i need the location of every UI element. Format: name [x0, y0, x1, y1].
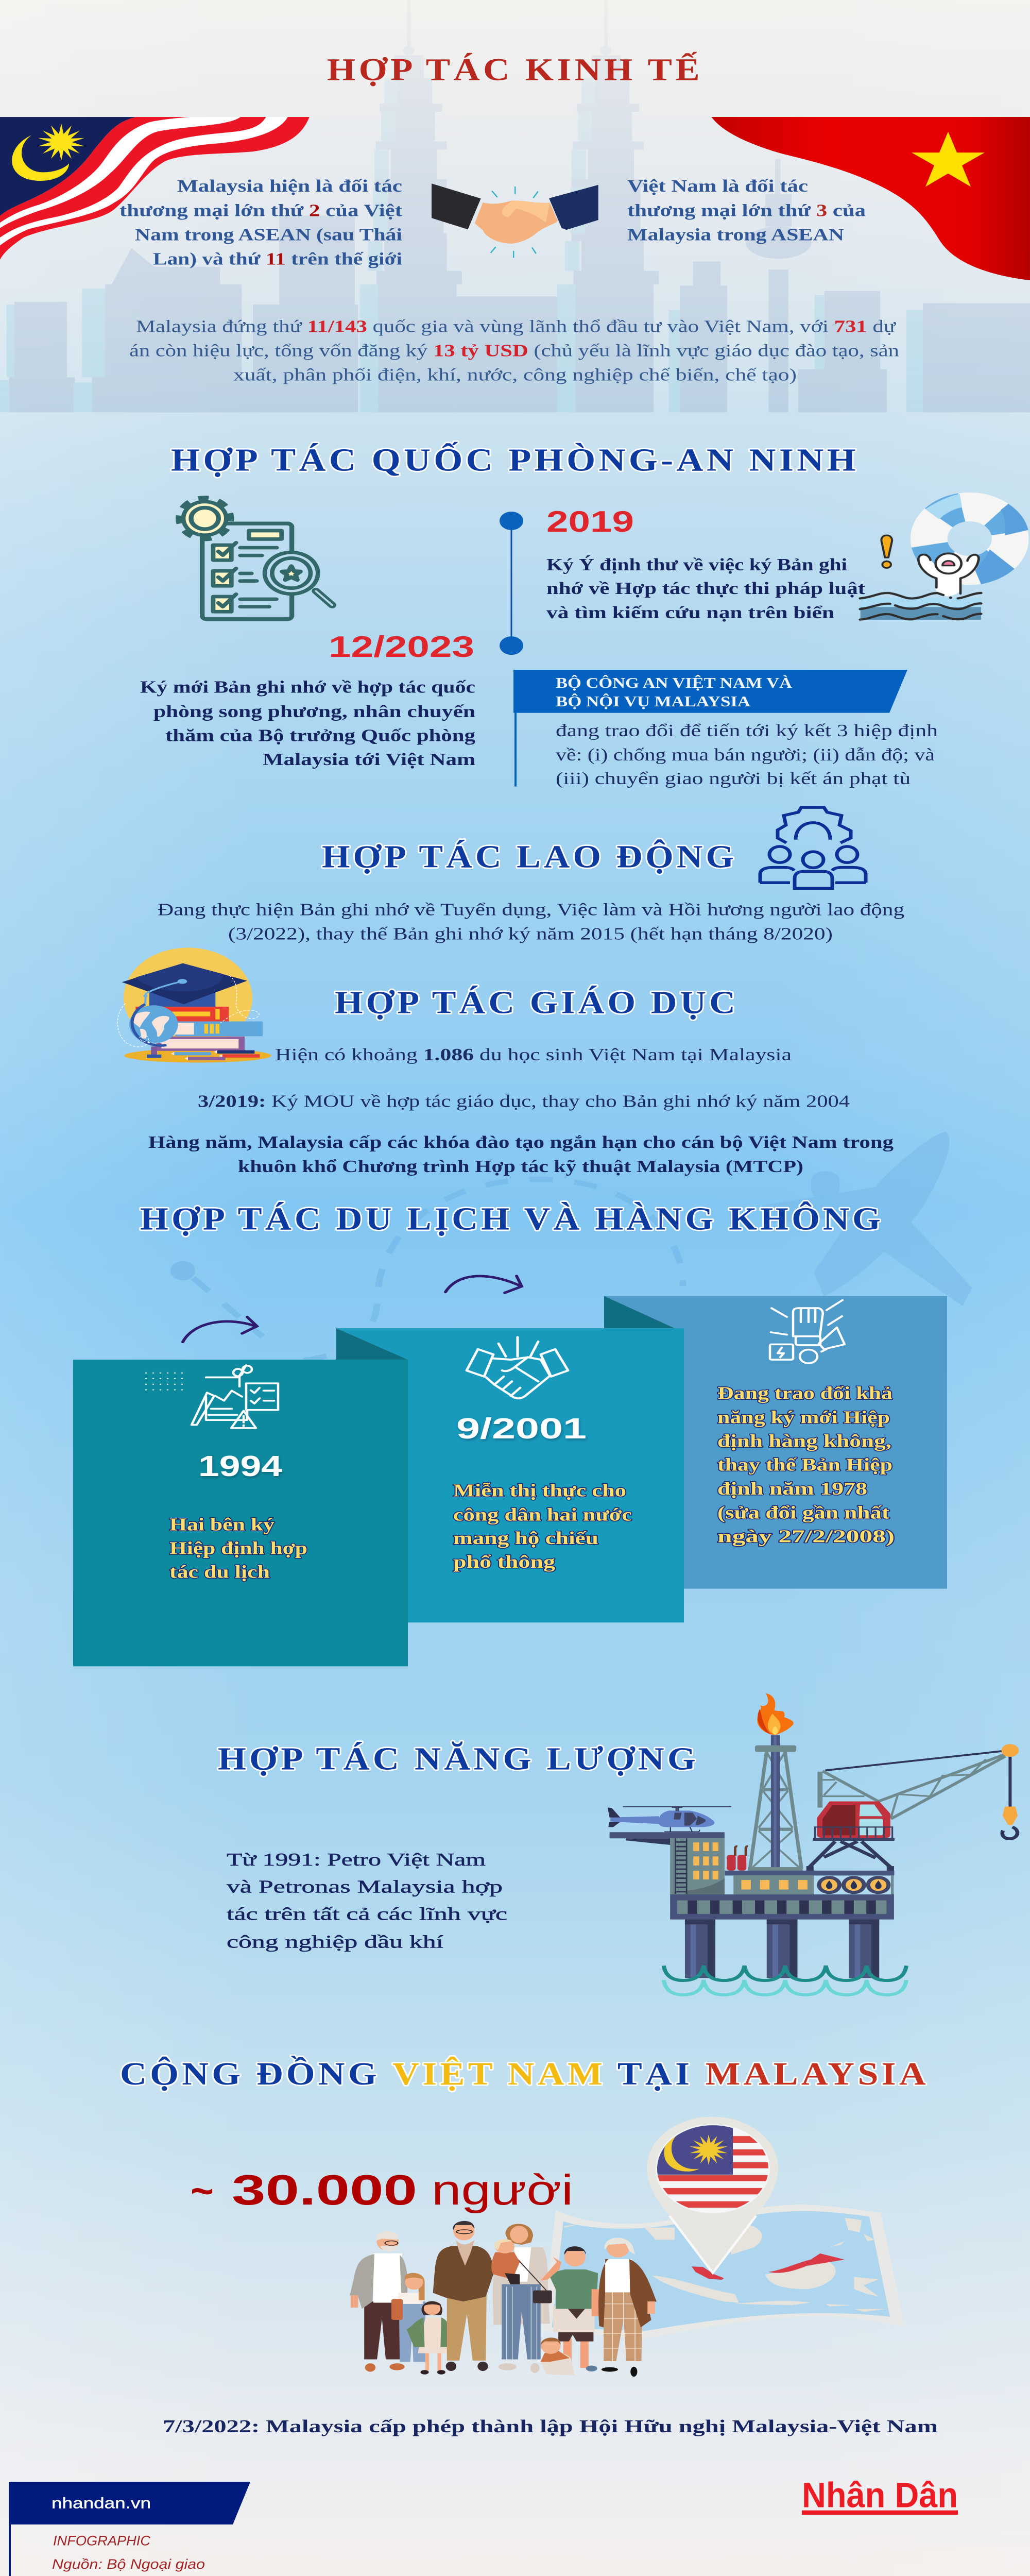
figure: about 30,000 people [191, 2166, 573, 2214]
flag: Vietnam [711, 117, 1030, 280]
icon: graduation cap, books and globe [117, 947, 271, 1062]
text: agreements under discussion: về: (i) chống mua bán người; (ii) dẫn độ; và [556, 745, 935, 765]
text: education facts [148, 1045, 894, 1176]
heading: tourism and aviation: HỢP TÁC DU LỊCH VÀ HÀNG KHÔNG [140, 1201, 884, 1237]
flag: Malaysia [0, 117, 310, 260]
derrick [748, 1735, 803, 1871]
crane boom [820, 1754, 1005, 1819]
text: energy cooperation: công nghiệp dầu khí [227, 1931, 443, 1952]
text: tourism agreement: Hai bên ký [169, 1515, 274, 1534]
text: 12/2023 description: thăm của Bộ trưởng Quốc phòng [165, 726, 475, 745]
text: investment paragraph: xuất, phân phối điện, khí, nước, công nghiệp chế biến, chế tạo) [233, 366, 797, 384]
text: tourism agreement: Hiệp định hợp [169, 1538, 307, 1558]
text: labor MoU: Đang thực hiện Bản ghi nhớ về Tuyển dụng, Việc làm và Hồi hương người lao động [158, 901, 904, 919]
icon: lifebuoy and drowning person [860, 494, 1028, 620]
banner: ministries [513, 670, 907, 787]
arrow: step one to two [183, 1317, 257, 1342]
platform decks [610, 1832, 894, 1920]
text: agreements under discussion: (iii) chuyển giao người bị kết án phạt tù [556, 769, 911, 788]
father [433, 2221, 493, 2371]
text: investment paragraph: án còn hiệu lực, tổng vốn đăng ký 13 tỷ USD (chủ yếu là lĩnh vực giáo dục đào tạo, sản [129, 342, 899, 360]
icon: handshake outline [467, 1337, 568, 1398]
grandmother [598, 2238, 657, 2377]
icon: fist and megaphone [770, 1300, 845, 1363]
footer: source: INFOGRAPHIC [53, 2533, 151, 2549]
text: Malaysia partner: Nam trong ASEAN (sau Thái [135, 226, 402, 244]
icon: people and gear [760, 807, 866, 888]
illustration: offshore oil rig [608, 1693, 1019, 1995]
toddler [541, 2337, 575, 2376]
text: energy cooperation: Từ 1991: Petro Việt Nam [227, 1850, 486, 1870]
text: air agreement: định năm 1978 [717, 1479, 867, 1499]
text: 2019 description: nhớ về Hợp tác thực thi pháp luật [546, 579, 865, 598]
text: 2019 description [546, 555, 865, 622]
text: friendship association: 7/3/2022: Malaysia cấp phép thành lập Hội Hữu nghị Malaysia-Việt Nam [163, 2416, 938, 2436]
icon: handshake [432, 183, 598, 258]
text: visa exemption: mang hộ chiếu [453, 1528, 598, 1548]
mother holding baby [491, 2224, 552, 2373]
text: visa exemption [453, 1481, 632, 1572]
year 12/2023: 12/2023 [329, 631, 474, 664]
text: air agreement: thay thế Bản Hiệp [717, 1455, 892, 1475]
text: Vietnam partner: thương mại lớn thứ 3 của [627, 201, 866, 220]
crane cab [813, 1801, 895, 1841]
young girl in green [406, 2301, 453, 2375]
text: Malaysia partner [119, 177, 402, 268]
illustration: map [542, 2205, 905, 2338]
boy [541, 2246, 600, 2371]
card: 9/2001 visa exemption [336, 1328, 684, 1622]
text: tourism agreement [169, 1515, 307, 1582]
arrow: step two to three [445, 1276, 522, 1293]
text: agreements under discussion [556, 721, 938, 788]
text: 12/2023 description: phòng song phương, nhân chuyến [153, 702, 475, 721]
text: visa exemption: phổ thông [453, 1552, 555, 1572]
year 9/2001: 9/2001 [456, 1413, 587, 1445]
text: air agreement: năng ký mới Hiệp [717, 1408, 890, 1427]
text: 2019 description: và tìm kiếm cứu nạn trên biển [546, 603, 834, 622]
text: air agreement: Đang trao đổi khả [717, 1383, 892, 1403]
text: Malaysia partner: thương mại lớn thứ 2 của Việt [119, 201, 402, 220]
text: visa exemption: Miễn thị thực cho [453, 1481, 626, 1501]
figure: about 30,000 people: ~ [191, 2168, 214, 2213]
text: education facts: khuôn khổ Chương trình Hợp tác kỹ thuật Malaysia (MTCP) [238, 1157, 803, 1176]
text: Vietnam partner: Malaysia trong ASEAN [627, 226, 844, 244]
heading: labor: HỢP TÁC LAO ĐỘNG [322, 839, 737, 875]
illustration: family [350, 2221, 657, 2377]
logo: Nhân Dân: Nhân Dân [802, 2476, 958, 2515]
grandfather [350, 2231, 407, 2371]
figure: about 30,000 people: người [432, 2166, 573, 2214]
text: energy cooperation: và Petronas Malaysia hợp [227, 1876, 503, 1896]
text: education facts: 3/2019: Ký MOU về hợp tác giáo dục, thay cho Bản ghi nhớ ký năm 2004 [198, 1092, 850, 1111]
card: 1994 tourism agreement [73, 1360, 408, 1666]
text: air agreement: định hàng không, [717, 1431, 891, 1451]
text: labor MoU [158, 901, 904, 943]
background skyline [0, 0, 1030, 412]
text: investment paragraph [129, 317, 899, 384]
heading: energy: HỢP TÁC NĂNG LƯỢNG [218, 1741, 699, 1776]
platform legs [685, 1920, 879, 1978]
heading: Vietnamese community in Malaysia: CỘNG ĐỒNG VIỆT NAM TẠI MALAYSIA [120, 2056, 929, 2092]
text: Malaysia partner: Malaysia hiện là đối tác [177, 177, 402, 196]
text: labor MoU: (3/2022), thay thế Bản ghi nhớ ký năm 2015 (hết hạn tháng 8/2020) [228, 925, 833, 943]
icon: map pin with Malaysian flag [647, 2117, 778, 2273]
icon: document and pencil [146, 1365, 278, 1428]
banner: ministries: BỘ NỘI VỤ MALAYSIA [556, 693, 750, 710]
footer: source: nhandan.vn [52, 2495, 151, 2512]
helicopter [608, 1806, 731, 1832]
text: education facts: Hiện có khoảng 1.086 du học sinh Việt Nam tại Malaysia [275, 1045, 792, 1064]
text: air agreement [717, 1383, 895, 1547]
text: agreements under discussion: đang trao đổi để tiến tới ký kết 3 hiệp định [556, 721, 938, 740]
timeline [500, 512, 523, 655]
year 2019: 2019 [546, 505, 634, 538]
card: air agreement [604, 1296, 947, 1589]
year 1994: 1994 [198, 1450, 282, 1482]
flame [757, 1693, 794, 1735]
text: energy cooperation: tác trên tất cả các lĩnh vực [227, 1904, 507, 1924]
background airplane and dashed route [170, 1132, 972, 1361]
text: Vietnam partner [627, 177, 866, 244]
text: 12/2023 description [140, 678, 475, 769]
title: Hợp tác kinh tế: HỢP TÁC KINH TẾ [327, 52, 703, 87]
heading: defense and security: HỢP TÁC QUỐC PHÒNG-AN NINH [171, 442, 859, 478]
text: 12/2023 description: Ký mới Bản ghi nhớ về hợp tác quốc [140, 678, 475, 697]
figure: about 30,000 people: 30.000 [232, 2166, 417, 2214]
girl with overalls [391, 2273, 425, 2362]
icon: checklist with gear and magnifier [173, 494, 332, 619]
text: visa exemption: công dân hai nước [453, 1505, 632, 1524]
text: education facts: Hàng năm, Malaysia cấp các khóa đào tạo ngắn hạn cho cán bộ Việt Nam trong [148, 1133, 894, 1152]
crane pedestal [810, 1841, 890, 1867]
sea waves [664, 1965, 906, 1995]
footer: source: Nguồn: Bộ Ngoại giao [52, 2556, 205, 2572]
heading: education: HỢP TÁC GIÁO DỤC [335, 985, 739, 1020]
text: 2019 description: Ký Ý định thư về việc ký Bản ghi [546, 555, 847, 574]
text: Malaysia partner: Lan) và thứ 11 trên thế giới [153, 250, 402, 268]
footer: source [9, 2482, 250, 2576]
text: 12/2023 description: Malaysia tới Việt Nam [263, 750, 475, 769]
text: investment paragraph: Malaysia đứng thứ 11/143 quốc gia và vùng lãnh thổ đầu tư vào Việt Nam, với 731 dự [136, 317, 896, 336]
text: Vietnam partner: Việt Nam là đối tác [627, 177, 808, 196]
text: energy cooperation [227, 1850, 507, 1952]
text: air agreement: (sửa đổi gần nhất [717, 1503, 889, 1522]
banner: ministries: BỘ CÔNG AN VIỆT NAM VÀ [556, 674, 792, 691]
text: tourism agreement: tác du lịch [169, 1562, 270, 1582]
text: air agreement: ngày 27/2/2008) [717, 1527, 895, 1547]
